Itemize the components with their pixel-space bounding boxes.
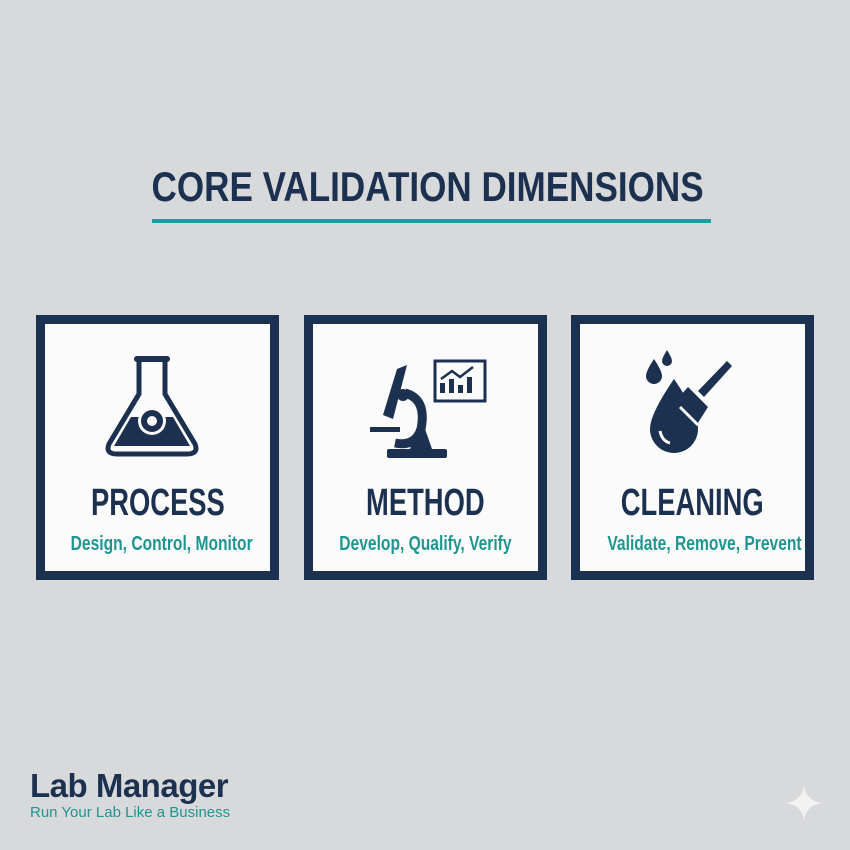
title underline bbox=[152, 219, 711, 223]
panel: method bbox=[304, 315, 547, 580]
icon: water drop and brush bbox=[646, 350, 732, 453]
tagline: Run Your Lab Like a Business bbox=[30, 804, 230, 821]
panel: process bbox=[36, 315, 279, 580]
subtitle: Validate, Remove, Prevent bbox=[607, 533, 802, 555]
heading: METHOD bbox=[366, 482, 485, 524]
icon: sparkle bbox=[787, 786, 821, 820]
logo name: Lab Manager bbox=[30, 767, 228, 804]
subtitle: Develop, Qualify, Verify bbox=[339, 533, 512, 555]
logo bbox=[30, 767, 230, 821]
panel: cleaning bbox=[571, 315, 814, 580]
title: CORE VALIDATION DIMENSIONS bbox=[152, 163, 704, 210]
icon: microscope with chart bbox=[370, 360, 486, 458]
heading: PROCESS bbox=[91, 482, 224, 524]
subtitle: Design, Control, Monitor bbox=[71, 533, 253, 555]
heading: CLEANING bbox=[621, 482, 764, 524]
icon: flask with gear bbox=[106, 356, 198, 456]
